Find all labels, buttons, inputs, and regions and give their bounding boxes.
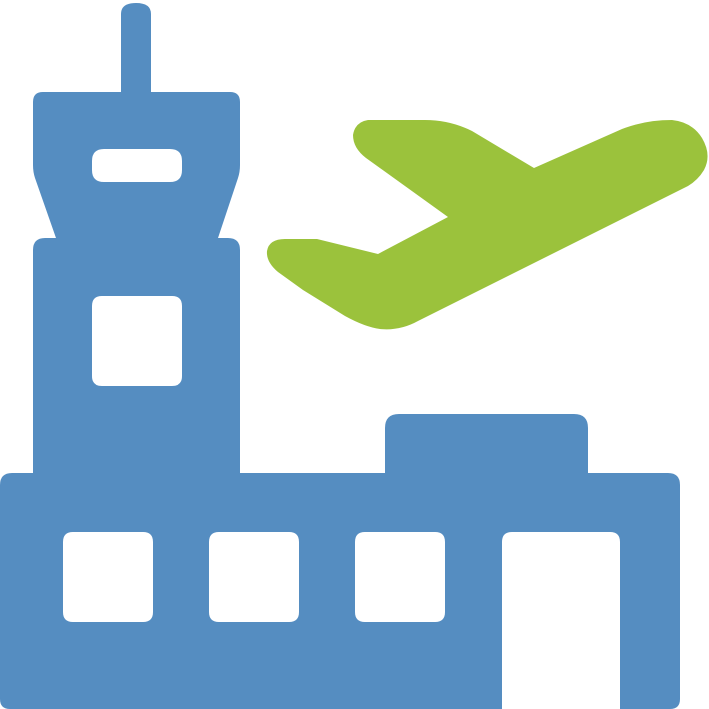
icon: departing airplane: [267, 120, 708, 329]
